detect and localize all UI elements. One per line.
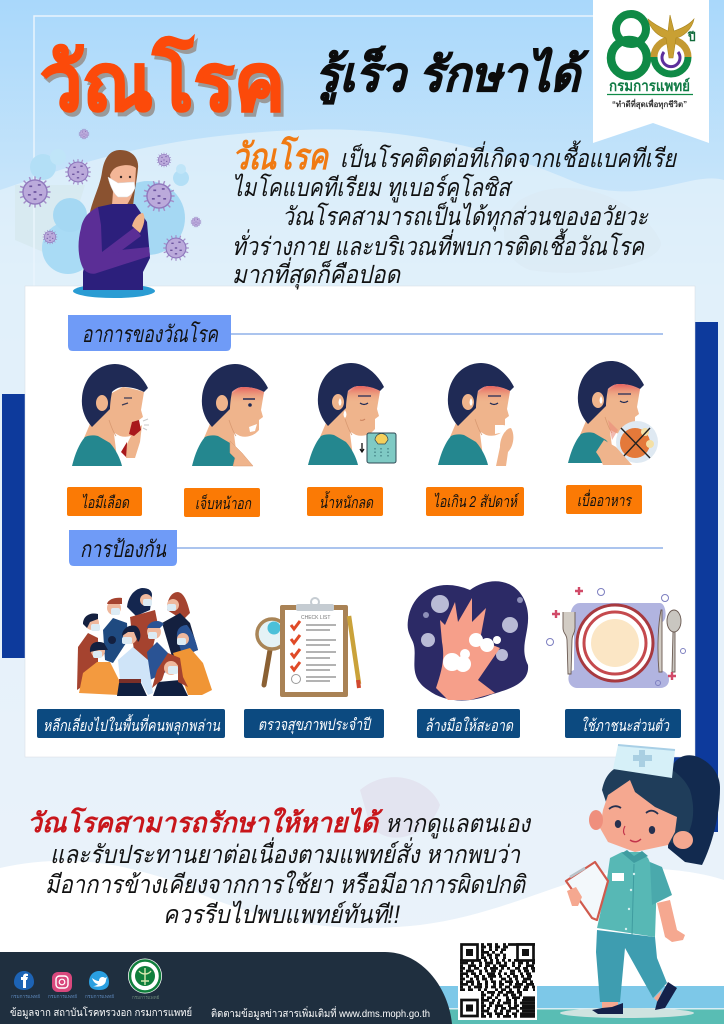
icon: instagram [48,972,77,999]
icon: ministry seal [128,958,162,1000]
icon: ministry seal: กรมการแพทย์ [132,994,160,1000]
logo: 80 mark [611,14,696,76]
website note: ติดตามข้อมูลข่าวสารเพิ่มเติมที่ www.dms.moph.go.th [211,1006,430,1020]
icon: personal tableware [546,587,686,688]
icon: checklist and magnifier [257,598,359,697]
icon: loss of appetite [568,361,658,465]
title: วัณโรค [40,35,285,127]
label: personal utensils: ใช้ภาชนะส่วนตัว [581,716,670,735]
icon: washing hands [408,581,528,700]
label: chest pain: เจ็บหน้าอก [195,494,252,513]
treatment message: หากดูแลตนเอง [385,810,532,839]
treatment message [27,806,532,929]
QR code [458,941,537,1020]
illustration: nurse [560,745,720,1018]
heading: prevention [69,530,663,566]
label: weight loss [307,487,383,516]
treatment highlight: วัณโรคสามารถรักษาให้หายได้ [27,806,384,838]
label: avoid crowded places [37,709,225,738]
icon: coughing blood [72,364,149,466]
title: วัณโรค [43,39,288,131]
floor strip [430,986,724,1024]
logo ribbon: 80 years [593,0,709,143]
main white panel [25,286,695,757]
left blue block [2,394,26,658]
label: cough with blood: ไอมีเลือด [81,493,130,512]
label: cough over two weeks [426,487,524,516]
panel: prevention [37,530,686,738]
label: cough with blood [67,487,142,516]
icon: instagram: กรมการแพทย์ [48,993,77,999]
logo: department name: กรมการแพทย์ [609,77,690,95]
icon: facebook: กรมการแพทย์ [11,993,40,999]
icon: twitter: กรมการแพทย์ [85,993,114,999]
icon: facebook [11,971,40,999]
intro paragraph: วัณโรคสามารถเป็นได้ทุกส่วนของอวัยวะ [282,201,649,232]
label: loss of appetite [566,485,642,514]
label: avoid crowded places: หลีกเลี่ยงไปในพื้นที่คนพลุกพล่าน [43,714,221,736]
subtitle: รู้เร็ว รักษาได้ [315,45,590,105]
label: chest pain [184,488,260,517]
illustration: woman with mask and viruses [19,128,201,298]
intro paragraph: มากที่สุดก็คือปอด [232,257,402,290]
icon: checklist and magnifier: CHECK LIST [301,615,330,621]
icon: crowd wearing masks [77,588,212,696]
intro paragraph: เป็นโรคติดต่อที่เกิดจากเชื้อแบคทีเรีย [340,140,678,173]
heading: prevention: การป้องกัน [80,536,167,562]
right blue block [666,322,718,832]
intro paragraph [232,135,678,290]
label: annual check-up [244,709,384,738]
intro paragraph: ทั่วร่างกาย และบริเวณที่พบการติดเชื้อวัณโรค [232,228,645,261]
treatment message: และรับประทานยาต่อเนื่องตามแพทย์สั่ง หากพบว่า [50,837,521,869]
label: wash hands [417,709,520,738]
label: cough over two weeks: ไอเกิน 2 สัปดาห์ [433,492,519,511]
logo: 80 mark: ปี [687,30,696,44]
label: wash hands: ล้างมือให้สะอาด [425,716,514,735]
intro lead word: วัณโรค [232,135,330,177]
footer bar [0,952,452,1024]
label: loss of appetite: เบื่ออาหาร [577,489,633,510]
heading: symptoms [68,315,663,351]
panel: symptoms [67,315,663,517]
treatment message: ควรรีบไปพบแพทย์ทันที!! [163,900,400,929]
label: personal utensils [565,709,681,738]
icon: twitter [85,971,114,999]
label: annual check-up: ตรวจสุขภาพประจำปี [258,716,372,735]
label: weight loss: น้ำหนักลด [319,491,374,512]
intro paragraph: ไมโคแบคทีเรียม ทูเบอร์คูโลซิส [232,173,513,203]
treatment message: มีอาการข้างเคียงจากการใช้ยา หรือมีอาการผิดปกติ [45,870,527,899]
icon: prolonged cough [438,363,514,466]
icon: weight loss with scale [308,363,396,465]
logo: slogan: “ทำดีที่สุดเพื่อทุกชีวิต” [612,98,687,110]
source credit: ข้อมูลจาก สถาบันโรคทรวงอก กรมการแพทย์ [10,1006,192,1019]
icon: chest pain [192,364,268,466]
heading: symptoms: อาการของวัณโรค [82,321,219,347]
